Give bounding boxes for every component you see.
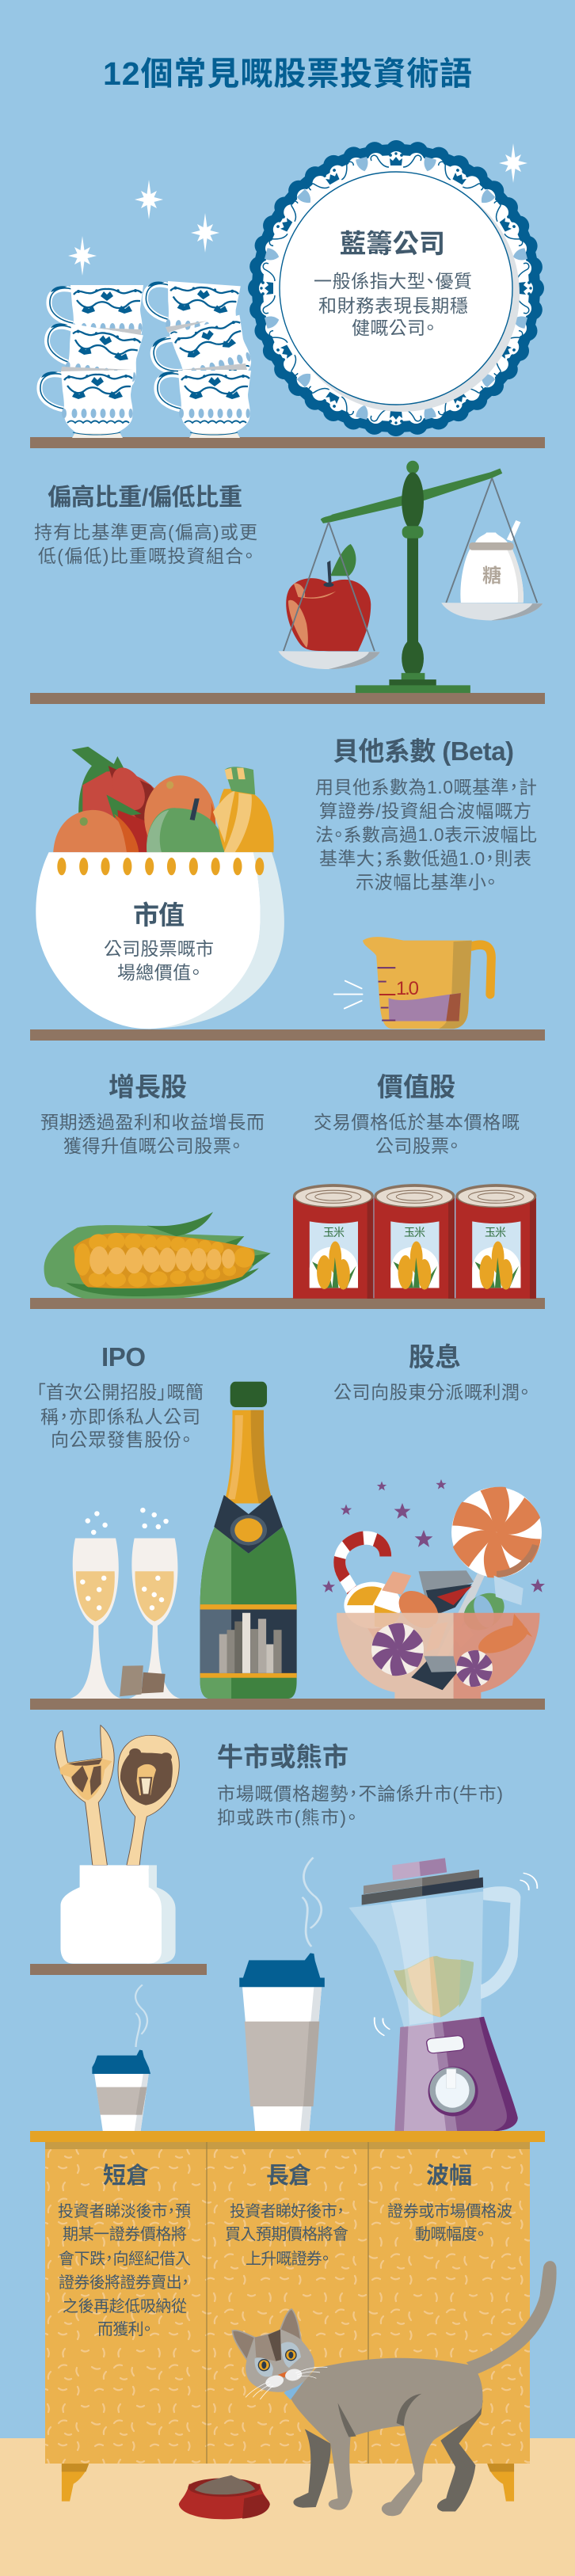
icon: champagne flutes and bottle xyxy=(70,1382,297,1699)
text: volatility description: 證券或市場價格波 xyxy=(387,2202,512,2220)
text: overweight description: 低(偏低)比重嘅投資組合。 xyxy=(38,546,253,566)
text: short position description: 期某一證券價格將 xyxy=(63,2225,187,2243)
shelf xyxy=(30,1029,545,1041)
text: blue chip description: 和財務表現長期穩 xyxy=(318,295,468,316)
text: market cap description: 公司股票嘅市 xyxy=(104,938,214,959)
icon: corn cob xyxy=(44,1212,271,1299)
panel: growth and value stocks xyxy=(30,1072,545,1309)
label: 1.0 mark: 1.0 xyxy=(396,978,419,999)
heading: short position: 短倉 xyxy=(103,2163,149,2189)
text: blue chip description xyxy=(314,271,472,338)
text: IPO description: 向公眾發售股份。 xyxy=(51,1429,191,1450)
text: dividend description: 公司向股東分派嘅利潤。 xyxy=(333,1382,529,1402)
labels: corn can text: 玉米 xyxy=(485,1226,506,1239)
shelf xyxy=(30,437,545,448)
heading: bull or bear: 牛市或熊市 xyxy=(217,1742,348,1771)
icon: grey cat xyxy=(232,2261,557,2516)
text: short position description xyxy=(58,2202,191,2338)
label: sugar: 糖 xyxy=(482,565,501,587)
text: beta description: 法。系數高過1.0表示波幅比 xyxy=(315,824,537,845)
heading: growth stock: 增長股 xyxy=(109,1072,187,1102)
text: market cap description xyxy=(104,938,214,983)
floor xyxy=(0,2438,575,2576)
cabinet legs xyxy=(62,2464,514,2502)
text: value stock description xyxy=(314,1112,520,1156)
icon: wooden spoons in jar xyxy=(55,1726,179,1964)
text: growth stock description: 獲得升值嘅公司股票。 xyxy=(63,1136,241,1156)
sparkles xyxy=(68,143,527,276)
text: beta description: 示波幅比基準小。 xyxy=(356,872,496,892)
panel: overweight / underweight xyxy=(30,461,545,704)
icon: blender xyxy=(348,1858,537,2131)
text: bull or bear description: 市場嘅價格趨勢，不論係升市(牛市) xyxy=(217,1783,503,1804)
title: 12個常見嘅股票投資術語 xyxy=(103,55,472,92)
text: IPO description: 稱，亦即係私人公司 xyxy=(40,1406,200,1427)
heading: value stock: 價值股 xyxy=(377,1072,455,1102)
text: IPO description xyxy=(36,1382,204,1450)
shelf xyxy=(30,1298,545,1309)
text: IPO description: 「首次公開招股」嘅簡 xyxy=(36,1382,204,1402)
text: long position description: 買入預期價格將會 xyxy=(225,2225,348,2243)
heading: IPO: IPO xyxy=(101,1342,146,1372)
text: growth stock description: 預期透過盈利和收益增長而 xyxy=(40,1112,265,1132)
icon: balance scale with apple and sugar xyxy=(278,461,543,693)
panel: IPO and dividend xyxy=(30,1342,545,1710)
text: value stock description: 交易價格低於基本價格嘅 xyxy=(314,1112,520,1132)
heading: long position: 長倉 xyxy=(266,2163,311,2189)
text: short position description: 證券後將證券賣出， xyxy=(59,2274,189,2292)
labels: corn can text xyxy=(323,1226,506,1239)
text: beta description xyxy=(315,777,537,892)
text: short position description: 投資者睇淡後市，預 xyxy=(58,2202,191,2220)
shelf xyxy=(30,1699,545,1710)
text: volatility description xyxy=(387,2202,512,2243)
text: overweight description: 持有比基準更高(偏高)或更 xyxy=(34,522,257,542)
text: short position description: 會下跌，向經紀借入 xyxy=(59,2250,191,2268)
text: beta description: 算證券/投資組合波幅嘅方 xyxy=(319,801,531,821)
text: long position description xyxy=(225,2202,348,2268)
heading: beta: 貝他系數 (Beta) xyxy=(333,736,514,766)
icon: fruit bowl xyxy=(36,747,284,1029)
text: long position description: 上升嘅證券。 xyxy=(246,2250,329,2268)
text: market cap description: 場總價值。 xyxy=(117,962,200,983)
text: overweight description xyxy=(34,522,257,566)
cabinet body xyxy=(45,2142,530,2464)
heading: blue chip: 藍籌公司 xyxy=(340,229,445,258)
text: growth stock description xyxy=(40,1112,265,1156)
text: value stock description: 公司股票。 xyxy=(375,1136,459,1156)
icon: large coffee cup xyxy=(239,1858,325,2131)
panel: cabinet with short, long and volatility xyxy=(30,2131,557,2519)
text: short position description: 而獲利。 xyxy=(97,2320,151,2338)
heading: market cap: 市值 xyxy=(133,900,185,930)
heading: overweight: 偏高比重/偏低比重 xyxy=(48,485,242,511)
text: blue chip description: 一般係指大型、優質 xyxy=(314,271,472,291)
icon: decorative plate xyxy=(252,144,540,432)
text: bull or bear description xyxy=(217,1783,503,1828)
labels: corn can text: 玉米 xyxy=(323,1226,345,1239)
text: volatility description: 動嘅幅度。 xyxy=(415,2225,485,2243)
panel: market cap and beta xyxy=(30,736,545,1041)
icon: measuring cup xyxy=(334,937,491,1029)
text: short position description: 之後再趁低吸納從 xyxy=(63,2297,187,2315)
heading: volatility: 波幅 xyxy=(426,2163,472,2189)
text: blue chip description: 健嘅公司。 xyxy=(352,318,435,338)
icon: corn cans xyxy=(293,1184,536,1299)
shelf xyxy=(30,1964,207,1975)
counter top xyxy=(30,2131,545,2142)
icon: small coffee cup xyxy=(92,1984,150,2131)
panel: blue chip companies xyxy=(30,143,545,448)
heading: dividend: 股息 xyxy=(409,1342,461,1372)
panel: bull or bear market xyxy=(30,1726,537,2131)
text: long position description: 投資者睇好後市， xyxy=(230,2202,345,2220)
shelf xyxy=(30,693,545,704)
labels: corn can text: 玉米 xyxy=(404,1226,425,1239)
text: bull or bear description: 抑或跌市(熊市)。 xyxy=(217,1807,356,1828)
icon: stacked tea cups xyxy=(40,280,258,438)
text: beta description: 用貝他系數為1.0嘅基準，計 xyxy=(315,777,537,797)
icon: pet food bowl xyxy=(179,2475,270,2519)
icon: candy bowl xyxy=(322,1479,545,1699)
text: beta description: 基準大；系數低過1.0，則表 xyxy=(319,848,531,869)
